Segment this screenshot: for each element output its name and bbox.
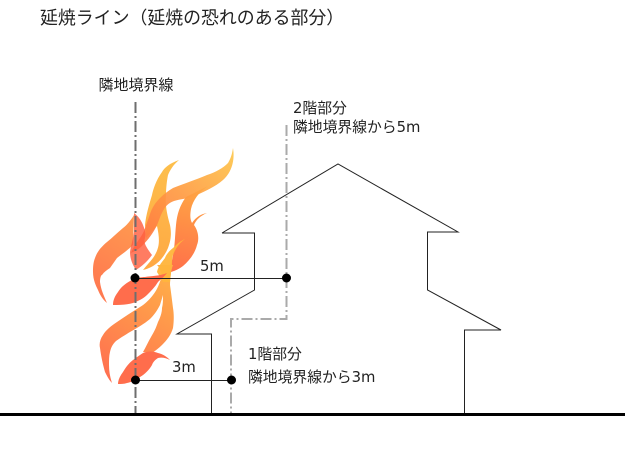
flame: right tongue (164, 186, 208, 274)
title: 延焼ライン（延焼の恐れのある部分） (40, 8, 344, 29)
2F/1F fire spread line (231, 125, 286, 413)
flame: upper left tongue (93, 215, 134, 303)
ground line (0, 413, 625, 416)
label: second floor: 2階部分 (293, 100, 347, 117)
label: 5m: 5m (200, 258, 224, 275)
label: second floor distance: 隣地境界線から5m (293, 119, 420, 136)
flame: tall yellow tongue (143, 160, 179, 270)
flame: red centre leaf (130, 213, 152, 270)
boundary line (134, 102, 136, 413)
flame: long band to upper right (131, 148, 234, 253)
3m distance line (131, 376, 236, 384)
label: boundary line: 隣地境界線 (98, 76, 174, 94)
flame: lower band (100, 265, 174, 383)
house outline (177, 164, 501, 413)
flames (93, 148, 234, 384)
flame: upper small leaf (113, 273, 167, 305)
flame: lower leaf (118, 352, 170, 384)
label: first floor: 1階部分 (248, 346, 302, 363)
5m distance line (130, 274, 291, 282)
label: 3m: 3m (172, 359, 196, 376)
flame: small yellow tip (157, 239, 185, 282)
label: first floor distance: 隣地境界線から3m (248, 369, 375, 386)
